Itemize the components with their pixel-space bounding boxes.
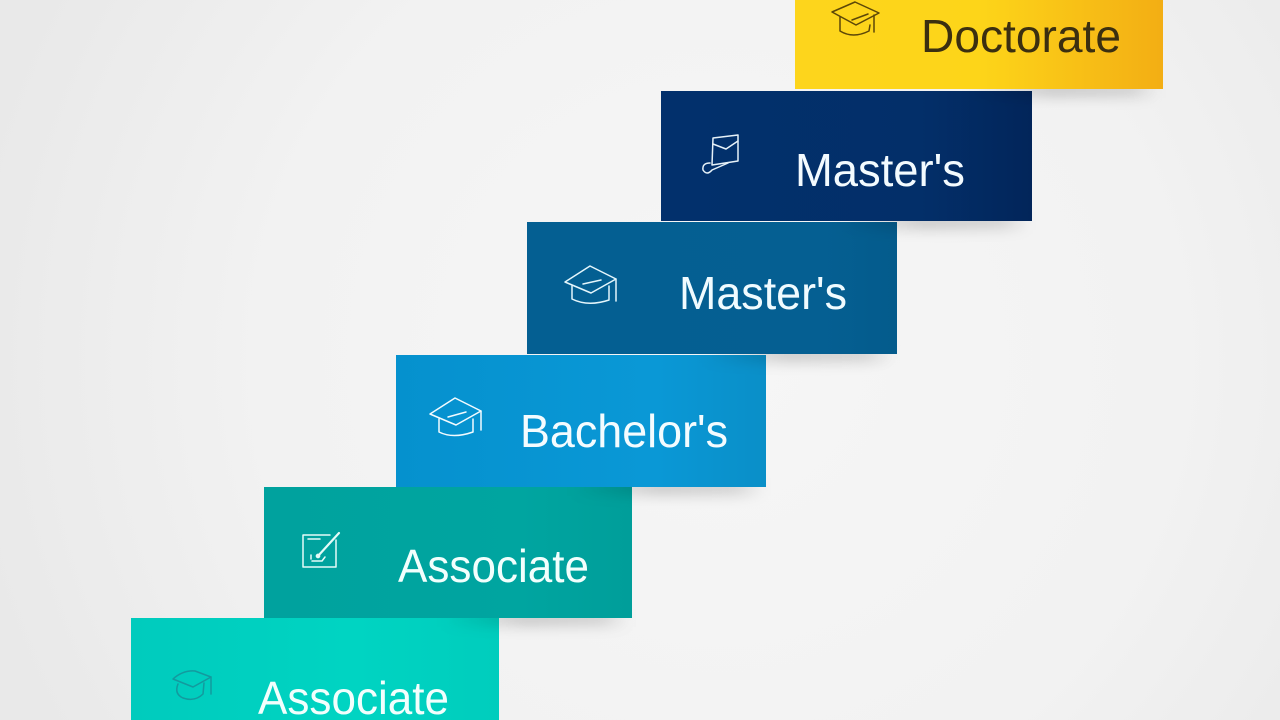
label: Master's, step 5: Master's [795,144,965,196]
shadow under step 5 [835,212,1030,230]
step 2: Associate [264,487,632,618]
icon: signed document, step 2 [303,533,339,567]
shadow under step 2 [440,609,630,627]
label: Doctorate: Doctorate [921,10,1121,62]
label: Master's, step 4: Master's [679,267,847,319]
icon: diploma, step 5 [703,135,738,173]
icon: graduation cap, step 6 [832,2,879,35]
step 4: Master's [527,222,897,354]
icon: graduation cap, step 4 [565,266,616,303]
label: Associate, step 2: Associate [398,540,589,592]
label: Bachelor's: Bachelor's [520,405,728,457]
step 1: Associate [131,618,499,720]
step 5: Master's [661,91,1032,221]
shadow under step 3 [570,478,765,496]
step 3: Bachelor's [396,355,766,487]
shadow under step 4 [700,345,895,363]
step 6: Doctorate [795,0,1163,89]
icon: graduation cap, step 1 [173,671,211,699]
shadow under step 6 [965,80,1160,98]
icon: graduation cap, step 3 [430,398,481,436]
